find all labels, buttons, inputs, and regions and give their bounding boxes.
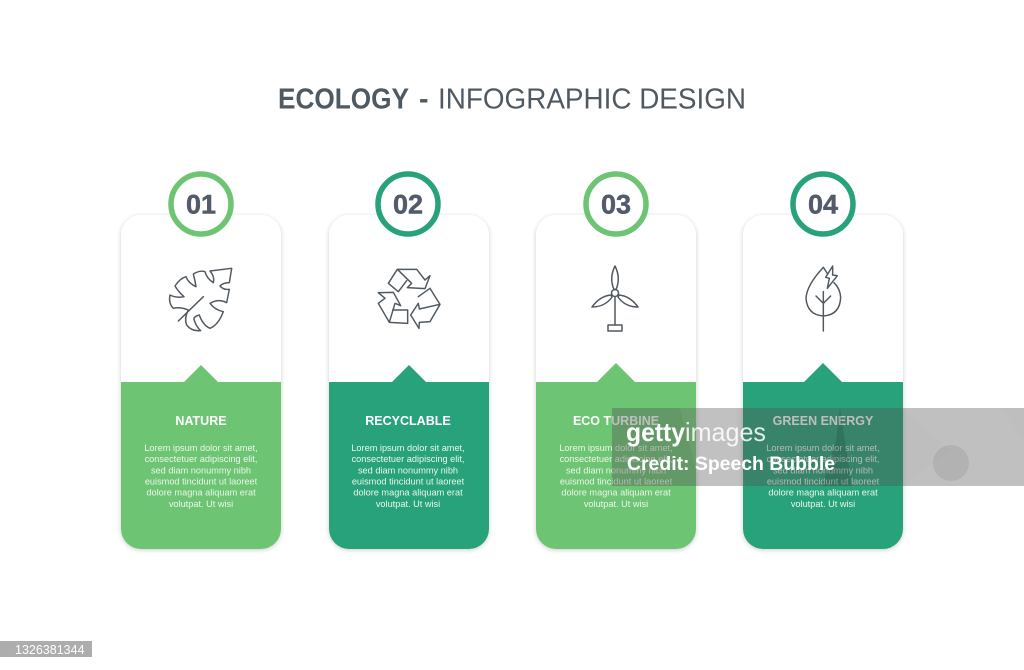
text block: recyclable: sed diam nonummy nibh: [358, 466, 458, 476]
heading: eco turbine: ECO TURBINE: [573, 414, 659, 428]
heading: nature: NATURE: [175, 414, 227, 428]
image id tag: [0, 641, 92, 657]
title: INFOGRAPHIC DESIGN: [438, 84, 746, 116]
text block: eco turbine: consectetuer adipiscing elit,: [560, 454, 672, 464]
icon: wind turbine: [592, 266, 638, 331]
text block: green energy: consectetuer adipiscing elit,: [767, 454, 879, 464]
panel footer: eco turbine: [536, 363, 696, 549]
text block: recyclable: consectetuer adipiscing elit,: [352, 454, 464, 464]
text block: nature: euismod tincidunt ut laoreet: [145, 476, 258, 486]
text block: recyclable: dolore magna aliquam erat: [353, 488, 463, 498]
text block: nature: volutpat. Ut wisi: [169, 499, 233, 509]
text block: green energy: euismod tincidunt ut laoreet: [767, 476, 880, 486]
number badge 01: [171, 174, 231, 234]
title: [278, 84, 746, 116]
panel footer: nature: [121, 365, 281, 549]
panel: green energy: [743, 174, 903, 549]
text block: green energy: dolore magna aliquam erat: [768, 488, 878, 498]
text block: green energy: Lorem ipsum dolor sit amet,: [766, 443, 880, 453]
watermark logo: getty: [626, 417, 686, 447]
image id tag: 1326381344: [15, 643, 85, 657]
text block: eco turbine: volutpat. Ut wisi: [584, 499, 648, 509]
watermark overlay: [612, 408, 1024, 486]
number badge 03: 03: [601, 190, 631, 220]
number badge 03: [586, 174, 646, 234]
number badge 04: 04: [808, 190, 838, 220]
text block: eco turbine: sed diam nonummy nibh: [566, 466, 666, 476]
watermark logo: [626, 417, 766, 447]
panel: recyclable: [329, 174, 489, 549]
heading: green energy: GREEN ENERGY: [773, 414, 874, 428]
text block: nature: Lorem ipsum dolor sit amet,: [144, 443, 258, 453]
icon: leaf with lightning bolt: [806, 266, 841, 331]
text block: recyclable: euismod tincidunt ut laoreet: [352, 476, 465, 486]
panel footer: green energy: [743, 363, 903, 549]
number badge 02: [378, 174, 438, 234]
icon: recycling arrows: [378, 269, 440, 328]
text block: recyclable: volutpat. Ut wisi: [376, 499, 440, 509]
text block: green energy: sed diam nonummy nibh: [773, 466, 873, 476]
text block: eco turbine: Lorem ipsum dolor sit amet,: [559, 443, 673, 453]
watermark credit: Credit: Speech Bubble: [627, 454, 835, 475]
text block: nature: consectetuer adipiscing elit,: [145, 454, 257, 464]
panel footer: recyclable: [329, 365, 489, 549]
watermark logo: images: [685, 417, 766, 447]
text block: green energy: volutpat. Ut wisi: [791, 499, 855, 509]
text block: eco turbine: dolore magna aliquam erat: [561, 488, 671, 498]
number badge 04: [793, 174, 853, 234]
panel: eco turbine: [536, 174, 696, 549]
text block: eco turbine: euismod tincidunt ut laoreet: [560, 476, 673, 486]
panel: nature: [121, 174, 281, 549]
number badge 02: 02: [393, 190, 423, 220]
heading: recyclable: RECYCLABLE: [365, 414, 451, 428]
text block: nature: dolore magna aliquam erat: [146, 488, 256, 498]
text block: recyclable: Lorem ipsum dolor sit amet,: [351, 443, 465, 453]
number badge 01: 01: [186, 190, 216, 220]
icon: monstera leaf: [170, 268, 232, 331]
title: ECOLOGY: [278, 84, 409, 116]
title: -: [419, 84, 428, 116]
text block: nature: sed diam nonummy nibh: [151, 466, 251, 476]
